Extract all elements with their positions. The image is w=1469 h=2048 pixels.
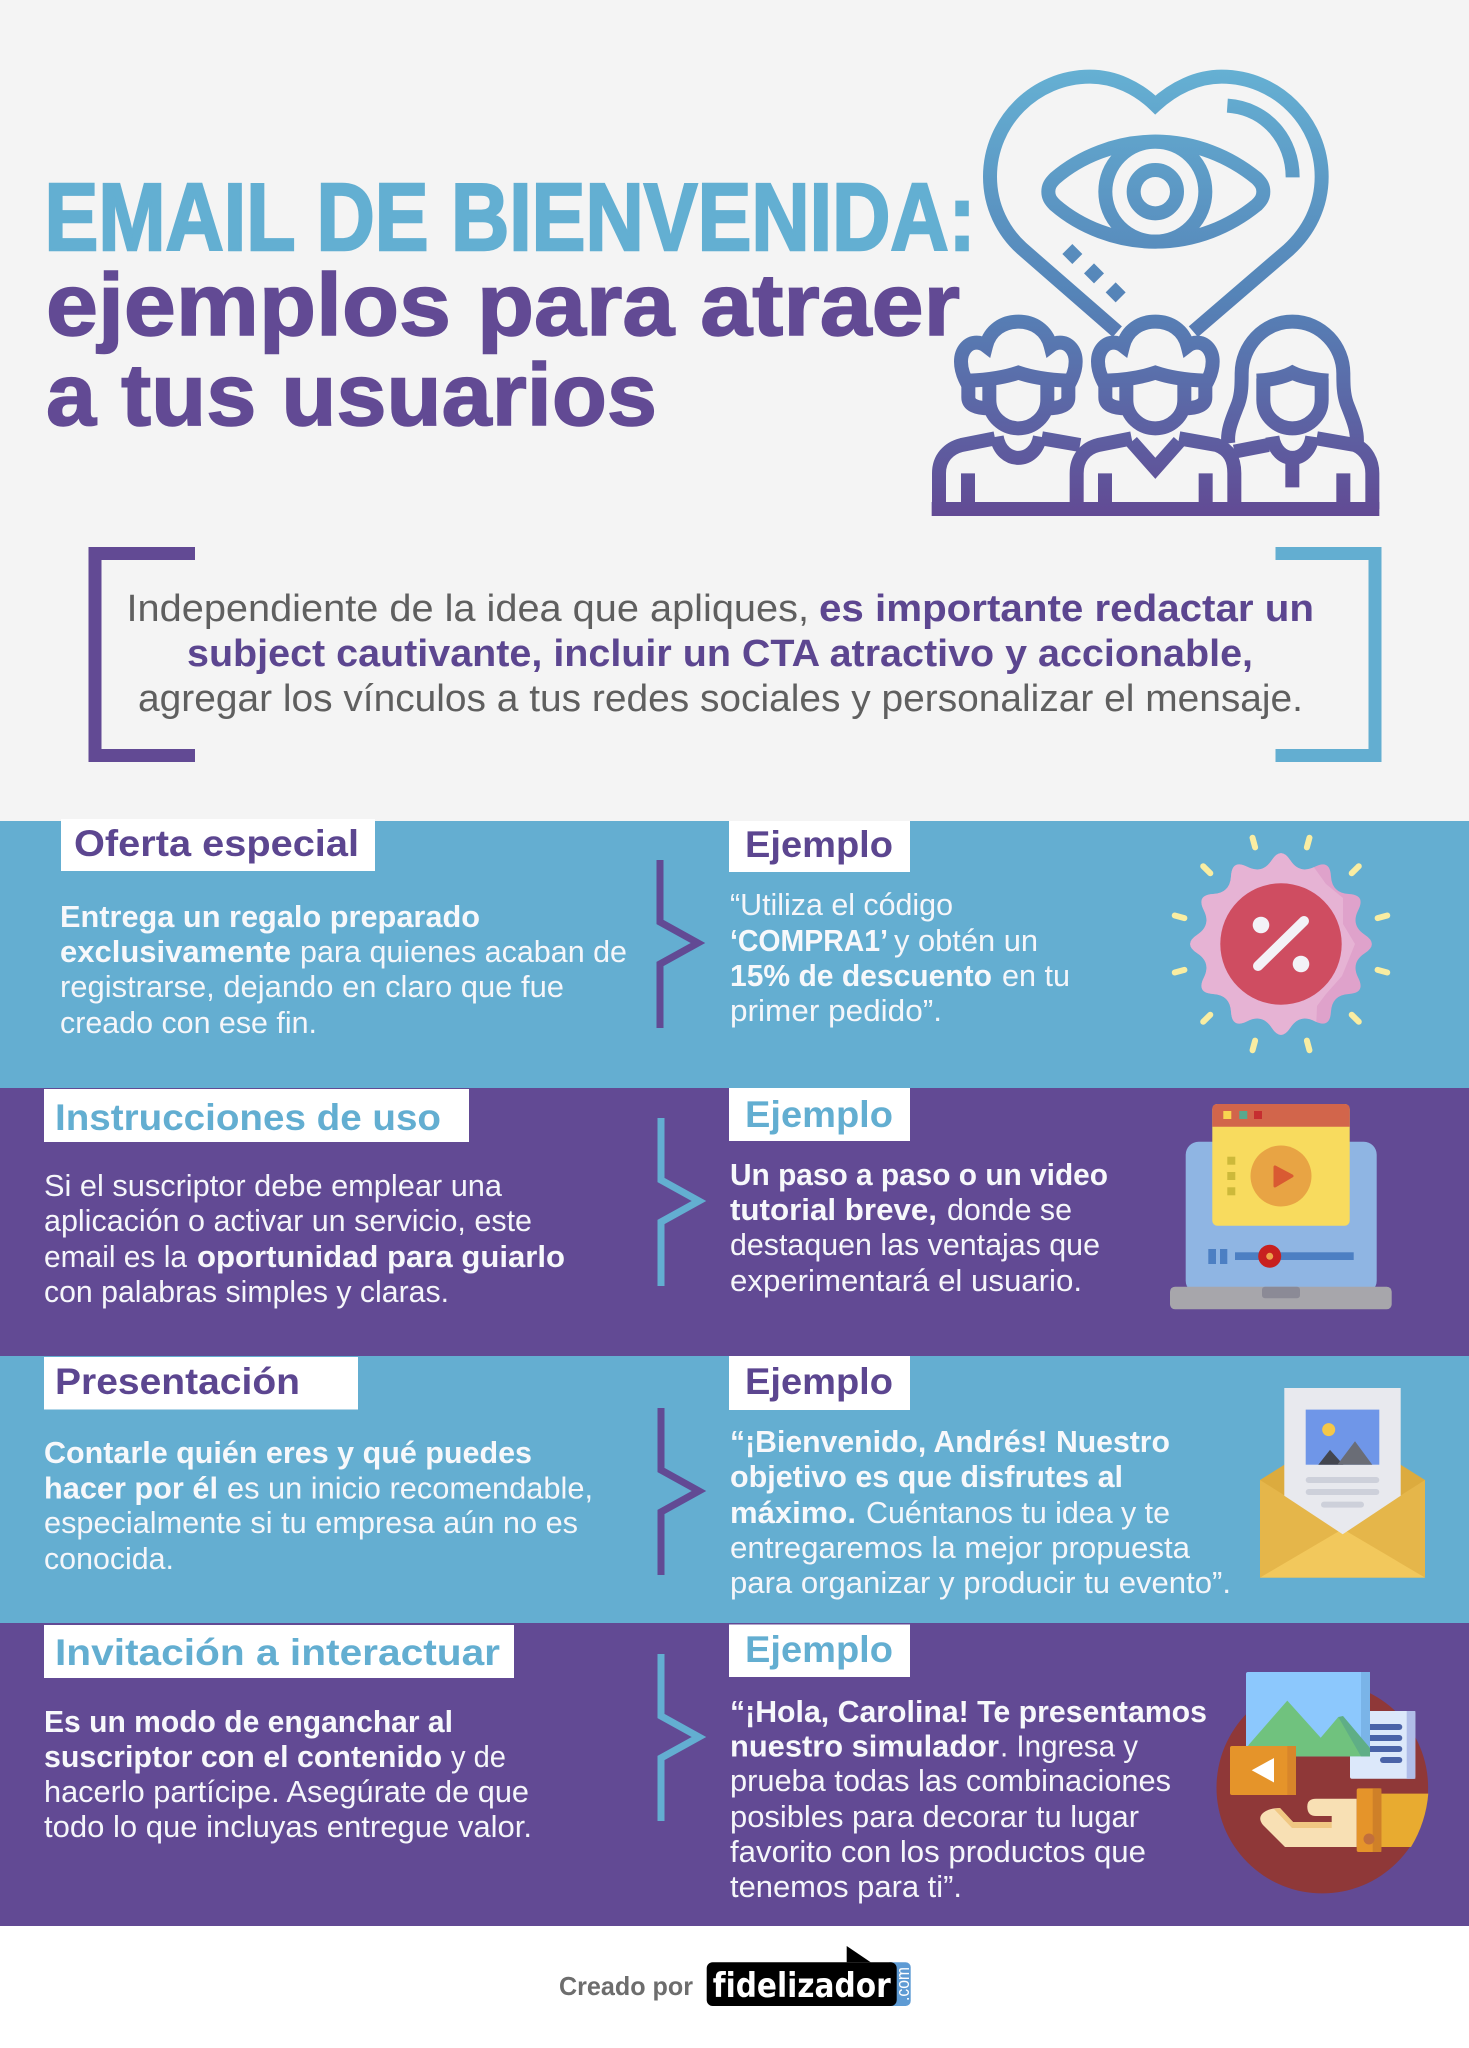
example text: . Ingresa y	[1000, 1730, 1139, 1764]
example text: para organizar y producir tu evento”.	[730, 1566, 1231, 1600]
envelope sides	[1260, 1480, 1425, 1578]
video controls	[1208, 1245, 1354, 1268]
footer background	[0, 1926, 1469, 2048]
text block: Contarle quién eres y qué puedes	[44, 1436, 532, 1470]
text block	[44, 1705, 532, 1844]
icon: heart highlight arc	[1227, 106, 1293, 177]
badge red circle	[1220, 883, 1342, 1005]
text block: con palabras simples y claras.	[44, 1275, 449, 1309]
left bracket	[95, 554, 195, 756]
credit text: Creado por	[559, 1971, 693, 2001]
text block: conocida.	[44, 1542, 174, 1576]
title	[44, 164, 976, 444]
text block	[44, 1436, 593, 1576]
text block: especialmente si tu empresa aún no es	[44, 1506, 578, 1540]
laptop base	[1170, 1287, 1392, 1309]
heading: instrucciones de uso	[44, 1089, 469, 1142]
video box	[1230, 1746, 1296, 1795]
icon: people base line	[932, 488, 1379, 530]
intro text	[126, 588, 1314, 720]
example heading: Ejemplo	[745, 1361, 893, 1402]
title: EMAIL DE BIENVENIDA:	[44, 164, 976, 271]
heading: presentación	[44, 1357, 358, 1410]
text block: Entrega un regalo preparado	[60, 900, 480, 934]
video window	[1212, 1104, 1350, 1226]
example heading: Ejemplo	[745, 1094, 893, 1135]
icon: heart, eye and three people	[932, 77, 1379, 509]
logo: fidelizador	[707, 1946, 913, 2006]
band background	[0, 1088, 1469, 1356]
badge seal	[1190, 853, 1372, 1035]
logo: fidelizador: fidelizador	[713, 1966, 891, 2006]
heading: oferta especial: Oferta especial	[74, 823, 359, 864]
example text: 15% de descuento	[730, 959, 992, 993]
example text: “¡Bienvenido, Andrés! Nuestro	[730, 1425, 1170, 1459]
text block	[44, 1169, 565, 1309]
example text: ‘COMPRA1’	[730, 924, 888, 958]
example text: objetivo es que disfrutes al	[730, 1460, 1123, 1494]
example text	[730, 1695, 1207, 1904]
example heading	[729, 821, 910, 872]
icon: left person	[939, 322, 1080, 509]
example heading: Ejemplo	[745, 824, 893, 865]
band background	[0, 1356, 1469, 1623]
band background	[0, 821, 1469, 1088]
text block	[60, 900, 627, 1040]
icon: dotted line	[1062, 244, 1126, 302]
envelope back flap	[1260, 1465, 1425, 1510]
text block: suscriptor con el contenido	[44, 1740, 442, 1774]
example text: en tu	[1002, 959, 1070, 993]
icon: hand with media	[1216, 1672, 1428, 1893]
example text: nuestro simulador	[730, 1730, 999, 1764]
heading: oferta especial	[61, 819, 375, 871]
example text	[730, 1425, 1231, 1600]
example text: tenemos para ti”.	[730, 1870, 962, 1904]
logo: fidelizador: .com	[893, 1967, 913, 2001]
text block: oportunidad para guiarlo	[197, 1240, 565, 1274]
example heading	[729, 1624, 910, 1677]
icon: discount badge	[1175, 838, 1387, 1050]
example text: donde se	[947, 1193, 1072, 1227]
intro text: Independiente de la idea que apliques,	[126, 588, 809, 630]
heading: instrucciones de uso: Instrucciones de uso	[55, 1097, 441, 1138]
example heading	[729, 1356, 910, 1410]
envelope bottom flap	[1260, 1529, 1425, 1578]
text block: aplicación o activar un servicio, este	[44, 1204, 532, 1238]
text block: todo lo que incluyas entregue valor.	[44, 1810, 532, 1844]
panel: invitación a interactuar	[0, 1623, 1469, 1926]
right bracket	[1276, 554, 1375, 756]
laptop screen	[1186, 1142, 1377, 1294]
icon: eye	[1048, 142, 1263, 242]
example text: posibles para decorar tu lugar	[730, 1800, 1139, 1834]
percent sign	[1253, 917, 1309, 972]
icon: center person	[1077, 322, 1234, 509]
heading: presentación: Presentación	[55, 1361, 300, 1402]
text block: hacerlo partícipe. Asegúrate de que	[44, 1775, 529, 1809]
intro text: subject cautivante, incluir un CTA atractivo y accionable,	[187, 633, 1253, 675]
icon: laptop with video	[1170, 1104, 1392, 1309]
example text: máximo.	[730, 1496, 856, 1530]
text block: exclusivamente	[60, 935, 291, 969]
heading: invitación a interactuar: Invitación a interactuar	[55, 1632, 500, 1673]
text block: para quienes acaban de	[300, 935, 627, 969]
example text: “¡Hola, Carolina! Te presentamos	[730, 1695, 1207, 1729]
panel: instrucciones de uso	[0, 1088, 1469, 1356]
laptop notch	[1262, 1287, 1300, 1298]
example text: Un paso a paso o un video	[730, 1158, 1108, 1192]
chevron arrow	[661, 1118, 699, 1286]
example text	[730, 888, 1070, 1028]
panel: intro callout	[95, 554, 1375, 756]
icon: envelope with letter	[1260, 1388, 1425, 1578]
page background	[0, 0, 1469, 821]
example text: experimentará el usuario.	[730, 1264, 1082, 1298]
picture	[1246, 1672, 1370, 1756]
title: a tus usuarios	[46, 345, 657, 444]
example text: y obtén un	[894, 924, 1038, 958]
panel: presentación	[0, 1356, 1469, 1623]
example text: “Utiliza el código	[730, 888, 953, 922]
example text: destaquen las ventajas que	[730, 1228, 1100, 1262]
text block: Es un modo de enganchar al	[44, 1705, 453, 1739]
text block: es un inicio recomendable,	[227, 1472, 593, 1506]
red circle	[1216, 1682, 1428, 1893]
title: ejemplos para atraer	[46, 255, 960, 354]
example heading	[729, 1088, 910, 1141]
chevron arrow	[660, 860, 698, 1028]
chevron arrow	[661, 1654, 699, 1821]
text block: Si el suscriptor debe emplear una	[44, 1169, 502, 1203]
text block: hacer por él	[44, 1472, 218, 1506]
example heading: Ejemplo	[745, 1629, 893, 1670]
example text: primer pedido”.	[730, 994, 942, 1028]
icon: heart outline	[990, 77, 1322, 332]
badge seal highlight	[1190, 853, 1372, 1035]
letter	[1284, 1388, 1401, 1534]
example text: favorito con los productos que	[730, 1835, 1146, 1869]
hand	[1260, 1788, 1428, 1852]
text block: y de	[451, 1740, 506, 1774]
text block: creado con ese fin.	[60, 1006, 317, 1040]
example text	[730, 1158, 1108, 1298]
example text: Cuéntanos tu idea y te	[866, 1496, 1170, 1530]
chevron arrow	[661, 1408, 699, 1575]
intro text: agregar los vínculos a tus redes sociales y personalizar el mensaje.	[138, 678, 1303, 720]
footer: credit	[559, 1946, 913, 2006]
band background	[0, 1623, 1469, 1926]
icon: right person	[1228, 322, 1372, 509]
text block: email es la	[44, 1240, 187, 1274]
panel: oferta especial	[0, 819, 1469, 1088]
heading: invitación a interactuar	[44, 1625, 514, 1678]
badge rays	[1175, 838, 1387, 1050]
example text: entregaremos la mejor propuesta	[730, 1531, 1190, 1565]
text block: registrarse, dejando en claro que fue	[60, 970, 564, 1004]
example text: tutorial breve,	[730, 1193, 937, 1227]
example text: prueba todas las combinaciones	[730, 1764, 1171, 1798]
document	[1350, 1711, 1415, 1779]
intro text: es importante redactar un	[819, 588, 1314, 630]
